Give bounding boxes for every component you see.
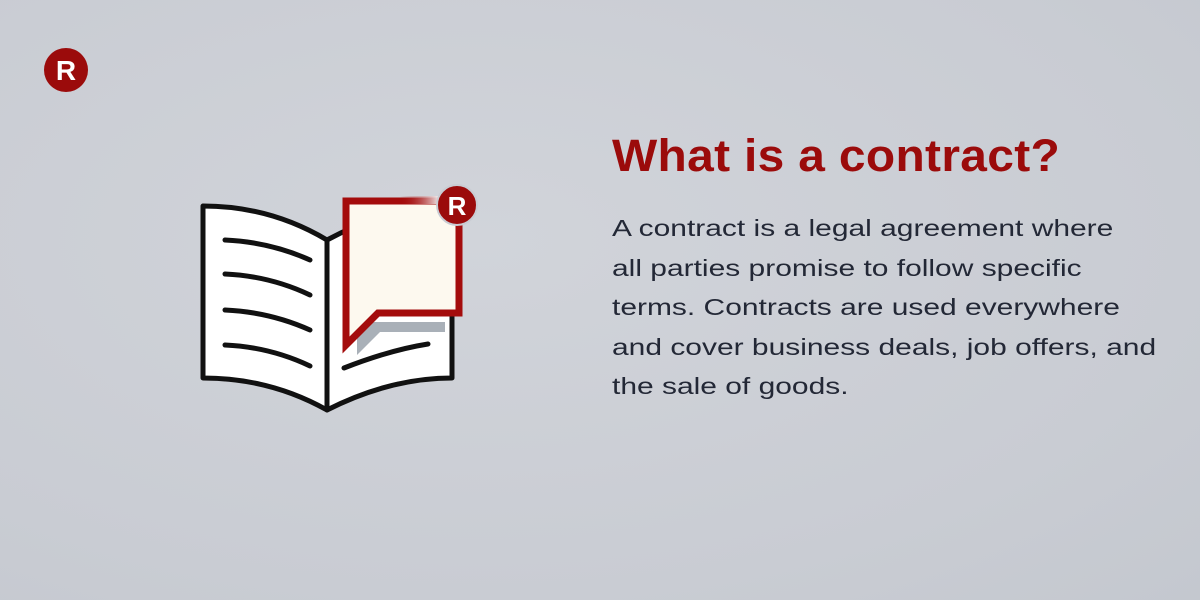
title: What is a contract? xyxy=(612,130,1060,181)
body text: all parties promise to follow specific xyxy=(612,254,1082,280)
icon: open book with speech bubble: R xyxy=(448,191,467,221)
body text: A contract is a legal agreement where xyxy=(612,215,1113,241)
body text: the sale of goods. xyxy=(612,373,849,399)
icon: open book with speech bubble xyxy=(200,186,476,412)
body text xyxy=(612,215,1156,399)
logo xyxy=(44,48,88,92)
body text: and cover business deals, job offers, and xyxy=(612,334,1156,360)
logo: R xyxy=(56,55,76,86)
body text: terms. Contracts are used everywhere xyxy=(612,294,1120,320)
